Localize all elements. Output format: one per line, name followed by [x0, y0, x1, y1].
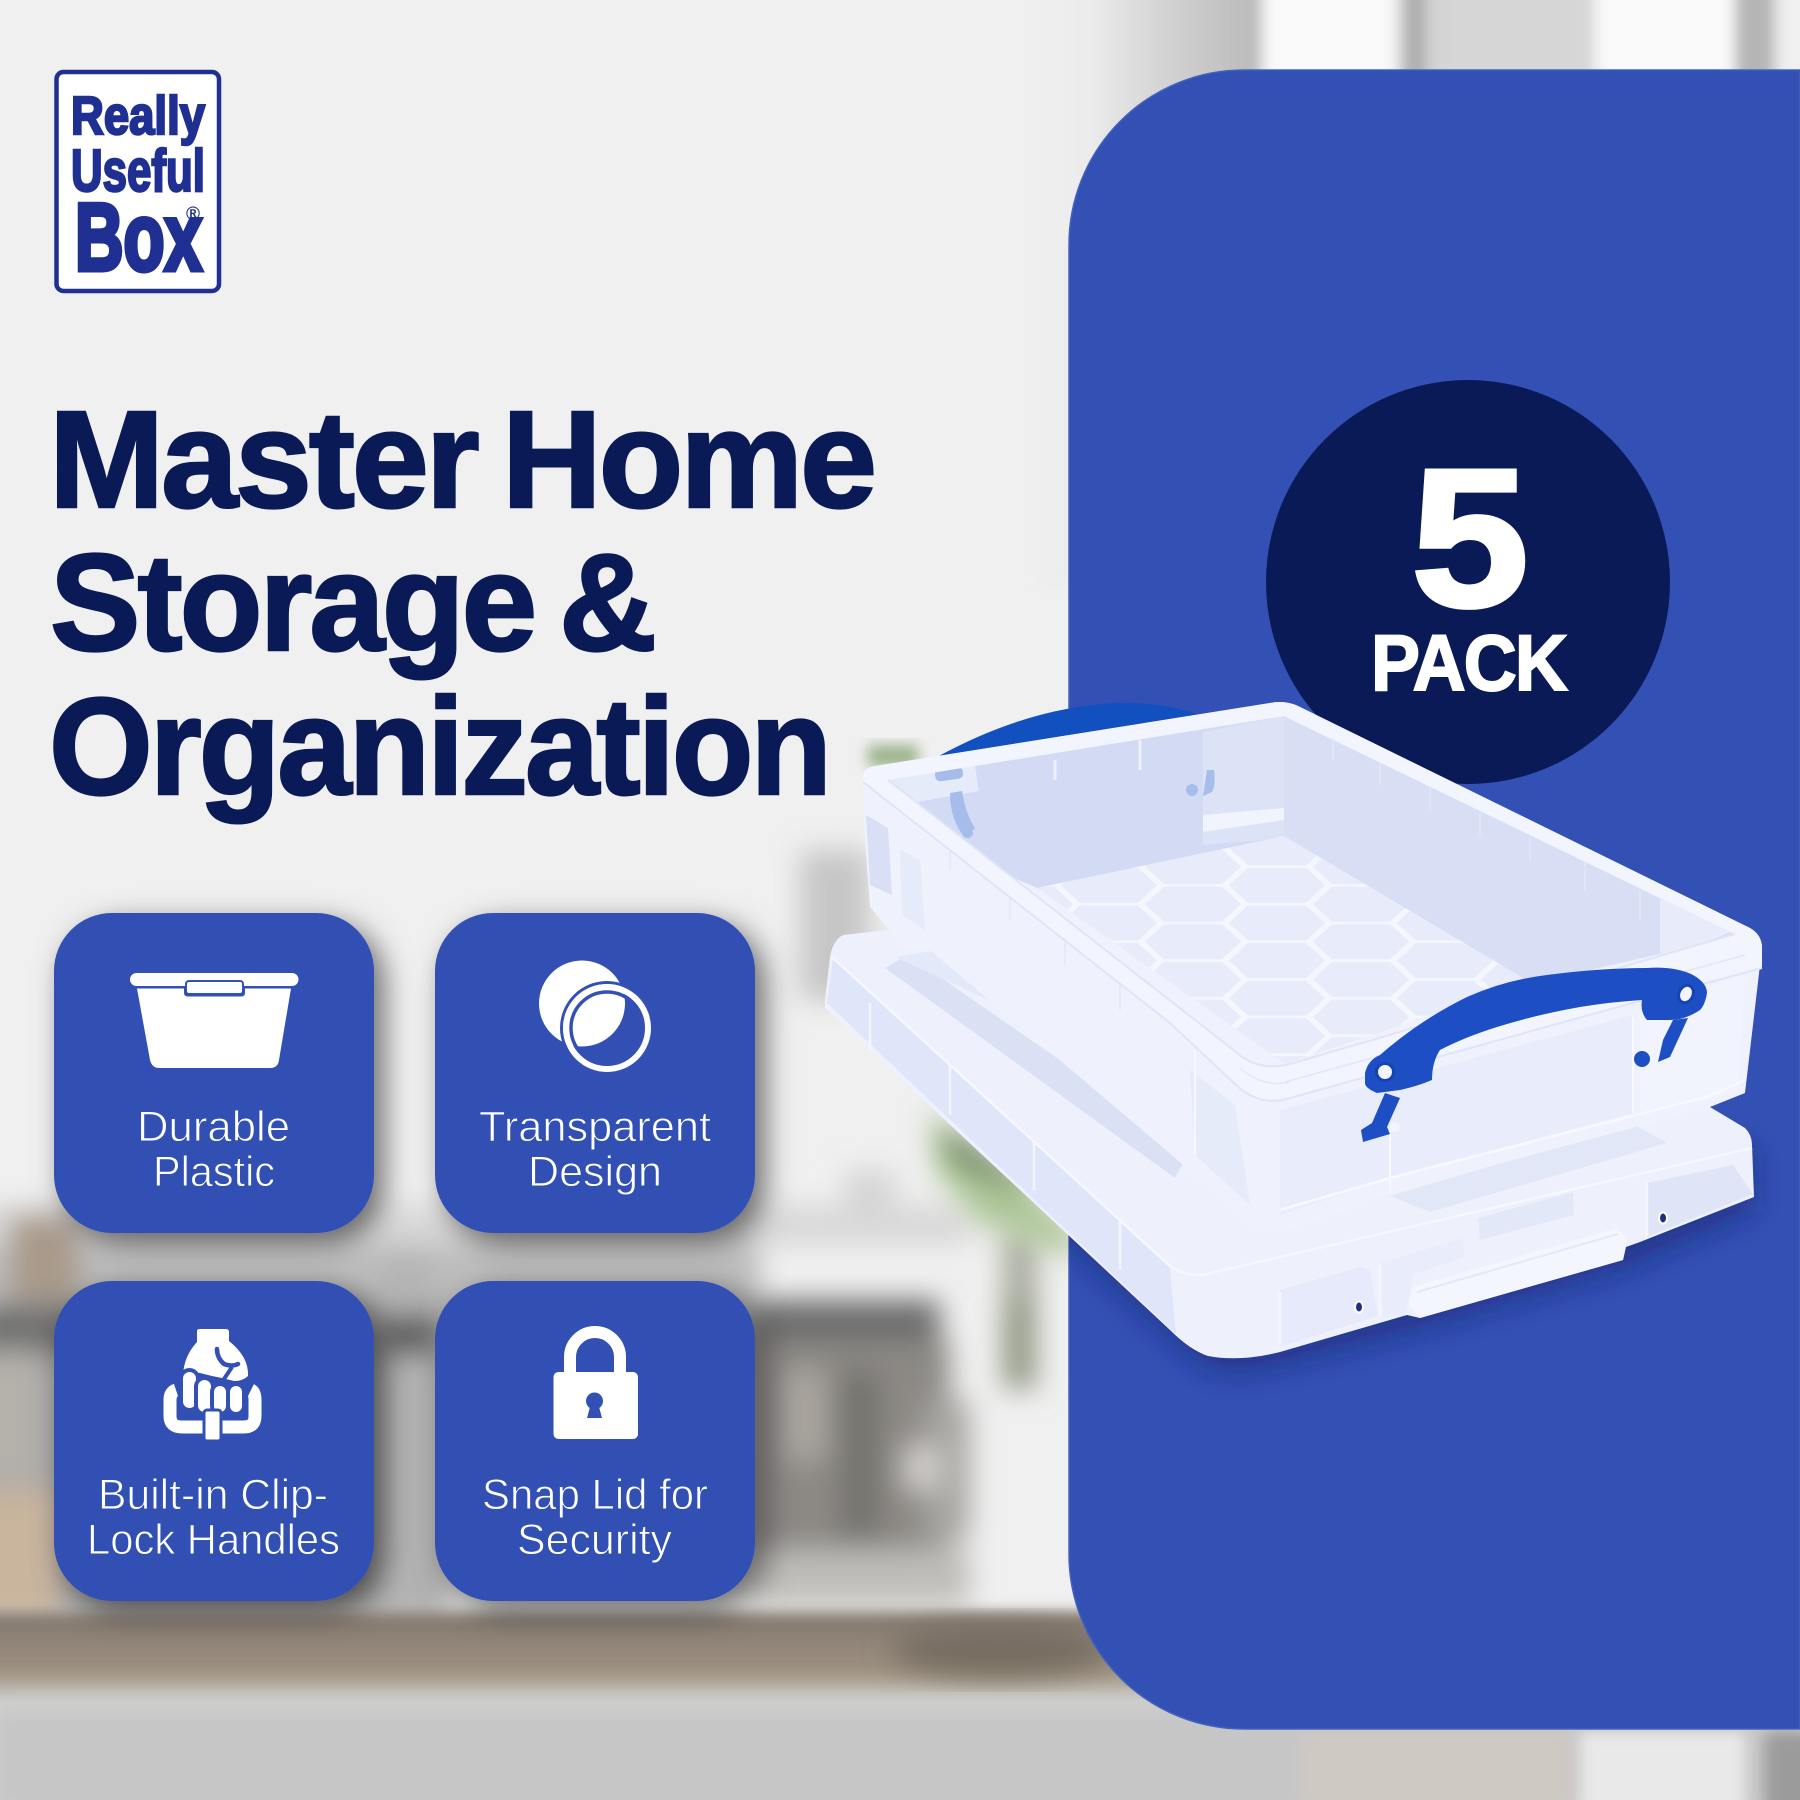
blue panel	[1069, 70, 1800, 1729]
card: transparent design	[435, 913, 755, 1233]
headline: Storage &	[50, 526, 654, 680]
logo: Really Useful Box: ®	[186, 204, 200, 225]
box interior back wall	[888, 716, 1284, 888]
label: durable plastic: Durable	[137, 1103, 290, 1151]
logo: Really Useful Box: Box	[75, 184, 202, 291]
rim shading edges	[863, 780, 1762, 1101]
logo: Really Useful Box: Really	[71, 86, 205, 146]
box interior end panel	[888, 716, 1284, 845]
box floor with honeycomb	[1037, 836, 1530, 1064]
right corner pane	[1660, 892, 1730, 962]
logo: Really Useful Box	[56, 72, 219, 291]
box rim	[863, 702, 1762, 1101]
icon: plastic tub	[130, 973, 298, 1068]
rear handle	[937, 703, 1216, 757]
lid shadow on panel	[1069, 1142, 1765, 1382]
headline	[49, 383, 874, 824]
storage box body	[863, 702, 1762, 1232]
card: snap lid	[435, 1281, 755, 1601]
storage lid	[825, 930, 1754, 1358]
headline: Organization	[49, 670, 829, 824]
label: snap lid for security	[482, 1471, 708, 1564]
label: snap lid for security: Security	[517, 1516, 672, 1564]
label: durable plastic	[137, 1103, 290, 1196]
box interior right wall	[1284, 716, 1738, 985]
card: durable plastic	[54, 913, 374, 1233]
icon: padlock	[554, 1332, 638, 1439]
box side details	[866, 815, 1745, 1215]
label: durable plastic: Plastic	[153, 1148, 275, 1196]
label: built-in clip-lock handles	[87, 1471, 340, 1564]
icon: hand gripping handle	[170, 1329, 255, 1441]
label: snap lid for security: Snap Lid for	[482, 1471, 708, 1519]
label: transparent design: Transparent	[479, 1103, 711, 1151]
label: built-in clip-lock handles: Lock Handles	[87, 1516, 340, 1564]
handle seen through wall	[934, 766, 1215, 838]
badge: 5 pack: PACK	[1371, 618, 1568, 707]
label: transparent design: Design	[528, 1148, 662, 1196]
badge: 5 pack: 5	[1411, 428, 1529, 648]
rim highlights	[950, 738, 1745, 1083]
badge: 5 pack	[1266, 380, 1670, 784]
logo: Really Useful Box: Useful	[71, 138, 205, 204]
product: clear storage box with lid	[825, 702, 1762, 1371]
card: clip-lock handles	[54, 1281, 374, 1601]
headline: Master Home	[49, 383, 874, 537]
label: built-in clip-lock handles: Built-in Clip-	[98, 1471, 328, 1519]
icon: overlapping circles	[539, 960, 652, 1074]
front handle	[1361, 968, 1707, 1142]
label: transparent design	[479, 1103, 711, 1196]
